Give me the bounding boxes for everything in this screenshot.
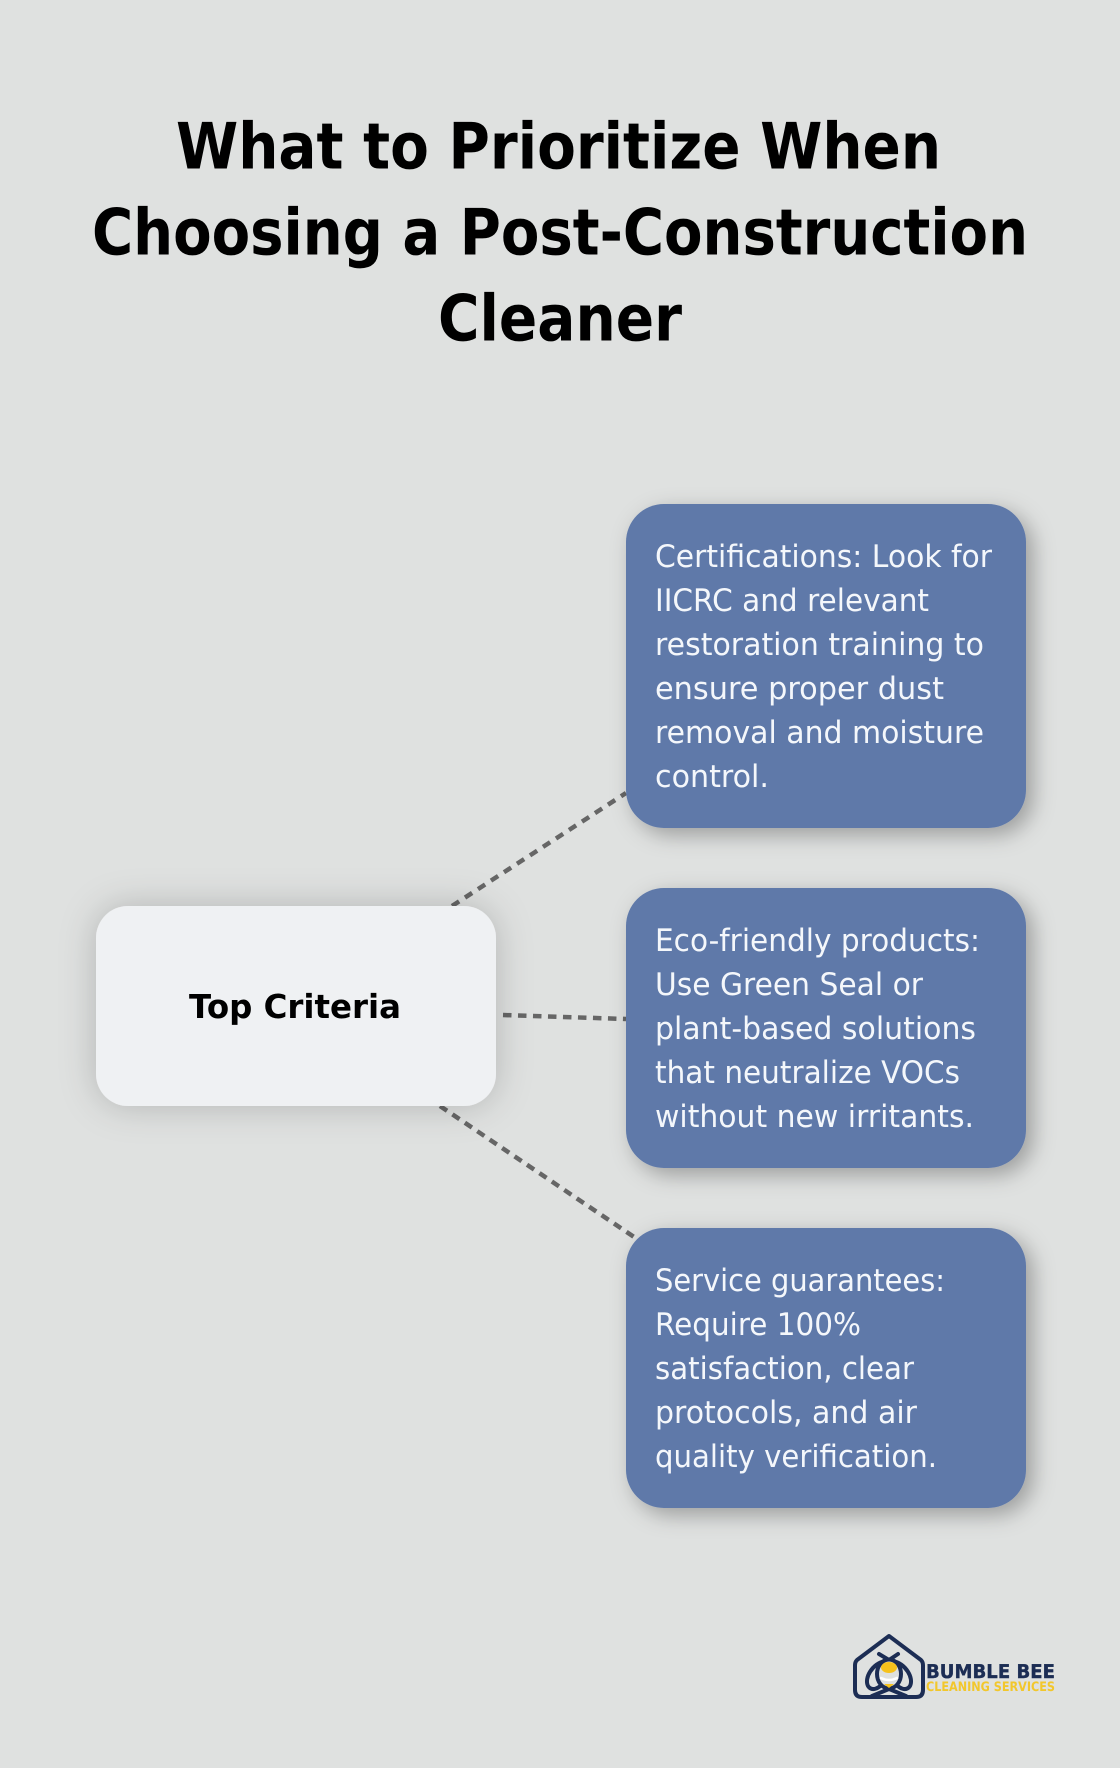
title: Cleaner [438, 282, 682, 356]
panel: certifications: restoration training to [655, 627, 984, 663]
panel: certifications: control. [655, 759, 769, 795]
icon: house with bee [855, 1636, 923, 1697]
panel: eco-friendly products [626, 888, 1026, 1168]
panel: service guarantees [626, 1228, 1026, 1508]
connector: center to eco-friendly products [503, 1015, 626, 1019]
panel: service guarantees: protocols, and air [655, 1395, 917, 1431]
wordmark: BUMBLE BEE [926, 1661, 1055, 1683]
panel: certifications: IICRC and relevant [655, 583, 929, 619]
title [92, 110, 1028, 356]
connector: center to service guarantees [440, 1106, 634, 1237]
panel: certifications [626, 504, 1026, 828]
tagline: CLEANING SERVICES [926, 1680, 1055, 1695]
logo: Bumble Bee Cleaning Services [855, 1636, 1055, 1697]
panel: service guarantees: Require 100% [655, 1307, 861, 1343]
title: What to Prioritize When [176, 110, 941, 184]
panel: certifications: ensure proper dust [655, 671, 944, 707]
panel: service guarantees: quality verification. [655, 1439, 937, 1475]
panel: certifications: Certifications: Look for [655, 539, 992, 575]
panel: top criteria: Top Criteria [189, 987, 401, 1026]
panel: eco-friendly products: without new irritants. [655, 1099, 974, 1135]
panel: eco-friendly products: Use Green Seal or [655, 967, 923, 1003]
panel: service guarantees: Service guarantees: [655, 1263, 945, 1299]
panel: eco-friendly products: plant-based solutions [655, 1011, 976, 1047]
panel: service guarantees: satisfaction, clear [655, 1351, 914, 1387]
panel: eco-friendly products: Eco-friendly products: [655, 923, 980, 959]
panel: eco-friendly products: that neutralize VOCs [655, 1055, 960, 1091]
panel: top criteria [96, 906, 496, 1106]
panel: certifications: removal and moisture [655, 715, 984, 751]
connector: center to certifications [452, 793, 626, 906]
